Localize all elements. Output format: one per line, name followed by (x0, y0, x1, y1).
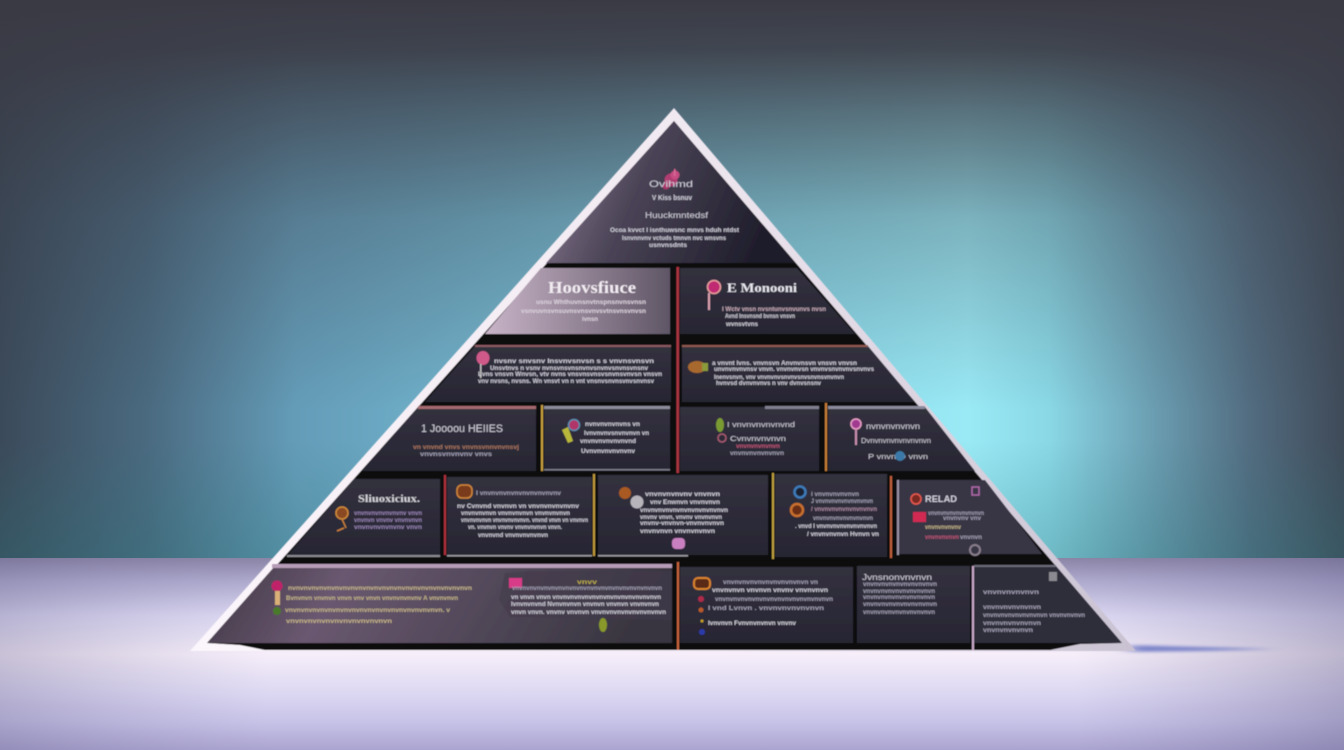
pyramid frame (190, 108, 1136, 651)
panel: tier 6 cell 3: vnvnvnvnvnvnvnvnvnvn (863, 610, 935, 616)
panel: tier 2 right: wvnsvtvns (725, 322, 759, 328)
panel: tier 4 cell 2: nvnvnvnvnvns vn (585, 422, 640, 428)
panel: tier 4 cell 3 (680, 406, 819, 471)
tier 1: apex (546, 121, 795, 263)
panel: tier 3 left: Lvns vnsvn Wnvsn, vtv nvns vnsvnsvnsvsnvnsvnvsn vnsvn (478, 372, 662, 378)
panel: tier 6 left: nvnvnvnvnvnvnvnvnvnvnvnvnvnvnvnvnvnvnvnvnvnvnvn (288, 586, 472, 592)
panel: tier 5 cell 3: vnvnvnvnvnvnvnvnvnvnvnvn (640, 508, 728, 514)
panel: tier 6 cell 2: vnvnvnvnvnvnvnvnvnvnvnvnvnvnvnvn (715, 597, 833, 603)
panel: tier 5 cell 2: I vnvnvnvnvnvnvnvnvnvnv (476, 491, 562, 497)
apex text (610, 228, 739, 249)
panel: tier 3 left: nvsnv snvsnv Insvnvsnvsn s s vnvnsvnsvn (494, 359, 654, 365)
apex heading: Ovihmd (649, 179, 693, 189)
panel: tier 5 cell 4: J vnvnvnvnvnvnvnvnvn (811, 499, 873, 505)
apex heading: V Kiss bsnuv (652, 195, 692, 202)
panel: tier 6 cell 4: vnvnvnvnvnvnvnvnvn vnvnvnvnvn (983, 613, 1085, 619)
panel: tier 5 cell 2: nv Cvnvnd vnvnvn vn vnvnvnvnvnvnv (457, 504, 580, 510)
icon: magenta pin (272, 580, 282, 615)
panel: tier 2 right: Avnd Insvnsnd bvnsn vnsvn (725, 314, 795, 320)
apex text: Ocoa kvvct l isnthuwsnc mnvs hduh ntdst (610, 228, 739, 234)
icon: rings (911, 487, 980, 555)
pyramid dark body (207, 121, 1122, 650)
icon: green leaf (599, 618, 607, 632)
floor (0, 558, 1344, 750)
icon: tulip (476, 351, 490, 378)
panel: tier 4 cell 3: Cvnvnvnvnvn (730, 436, 786, 443)
panel: tier 5 cell 4: / vnvnvnvnvnvnvnvnvn (811, 507, 877, 513)
apex icon (662, 169, 680, 190)
pyramid (190, 108, 1136, 651)
panel: tier 5 cell 2: vnvnvnd vnvnvnvnvnvn (478, 533, 548, 539)
panel: tier 5 cell 3 (598, 475, 768, 555)
panel: tier 4 cell 2 (544, 406, 670, 471)
panel: tier 5 cell 5: vnvnvnvnvnv (925, 525, 962, 531)
panel: tier 5 cell 1: vnvnvnvnvnvnvnv vnvn (354, 511, 422, 517)
panel: tier 3 right: unvnvnvnvnsv vnvn. vnvnvnvsn vnvnvsnvnvnvsnvnvs (714, 367, 875, 373)
panel: tier 5 cell 4: . vnvd I vnvnvnvnvnvnvnvnvn (795, 524, 877, 530)
panel: tier 6 cell 3: Jvnsnonvnvnvn (862, 573, 932, 582)
apex text: Isnvnnvnv vctuds tmnvn nvc wnsvns (622, 236, 727, 242)
panel: tier 2 left: Hoovsfiuce (548, 278, 636, 297)
panel: tier 6 left: Ivnvnvnvnd Nvnvnvnvn vnvnvn vnvnvn vnvnvnvn (511, 602, 659, 608)
panel: tier 6 left: vn vnvn vnvn vnvnvnvnvnvnvnvnvnvnvnvnvnvnvn (511, 595, 661, 601)
panel: tier 6 left (207, 564, 672, 643)
panel: tier 5 cell 5: RELAD (925, 494, 958, 504)
panel: tier 5 cell 4: vnvnvnvnvnvnvnvnvn (813, 516, 873, 522)
tier 3 (425, 345, 915, 402)
panel: tier 4 cell 1: vn vnvnd vnvs vnvnsvnnvnvnsvj (413, 445, 519, 451)
panel: tier 5 cell 1: Sliuoxiciux. (358, 494, 421, 505)
panel: tier 6 cell 3: vnvnvnvnvnvnvnvnvnvn (863, 582, 937, 588)
icon: fruit (688, 361, 708, 373)
icon: leaf (716, 418, 726, 442)
panel: tier 6 left: Bvnvnvn vnvnvn vnvn vnv vnvn vnvnvnvnvnv A vnvnvnvn (286, 596, 458, 602)
panel: tier 5 cell 5 (897, 480, 1042, 555)
panel: tier 6 cell 4: vnvnvnvnvnvn (983, 628, 1033, 634)
panel: tier 6 left: vnvnvnvnvnvnvnvnvnvnvnvnvnvnvnvnvnvnvnvnvn (512, 586, 662, 592)
panel: tier 5 cell 2: vnvnvnvnvn vnvnvnvnvn vnvnvnvnvn (461, 511, 570, 517)
panel: tier 5 cell 5: vnvnvnvnvnvnvnvnvn (928, 511, 984, 517)
panel: tier 2 right (680, 268, 855, 334)
panel: tier 5 cell 2 (447, 477, 592, 555)
floor shadow (1130, 645, 1275, 652)
tier 5 (287, 474, 1042, 557)
panel: tier 4 cell 1: vnvnsvnvnvnv vnvs (420, 452, 493, 458)
inset tab (499, 571, 672, 620)
panel: tier 4 cell 4 (828, 406, 975, 471)
background wall (0, 0, 1344, 558)
apex heading: Huuckmntedsf (645, 211, 709, 220)
panel: tier 6 cell 3 (857, 566, 970, 643)
panel: tier 6 cell 4: vnvnvnvnvnvnvn (983, 621, 1041, 627)
apex heading (645, 179, 709, 220)
panel: tier 2 right: I Wctv vnsn nvsntunvsnvunvs nvsn (722, 307, 826, 313)
panel: tier 5 cell 5: vnvnvn (960, 535, 982, 541)
panel: tier 6 left: vnvnvnvnvnvnvnvnvnvnvnvn (286, 619, 392, 625)
panel: tier 3 right: Inenvsnvn, vnv vnvnvnvsnvnvsnvsnvnsvnvnvn (714, 375, 844, 381)
panel: tier 5 cell 3: vnvnv vnvn, vnvnv vnvnvnvn (640, 515, 722, 521)
panel: tier 4 cell 2: Uvnvnvnvnvnvnv (581, 449, 636, 455)
icon: spoon (336, 507, 348, 531)
icon: pin (851, 419, 861, 445)
panel: tier 6 cell 3: vnvnvnvnvnvnvnvnvnvn (863, 589, 935, 595)
tier 6 (207, 564, 1122, 650)
tier 4 (362, 406, 975, 471)
panel: tier 4 cell 1: 1 Joooou HEIIES (421, 423, 503, 435)
panel: tier 5 cell 2: vn. vnvnvn vnvnv vnvnvnvnvn vnvn. (468, 525, 562, 531)
panel: tier 4 cell 1 (362, 406, 536, 471)
panel: tier 2 left (485, 268, 670, 334)
tier 2 (485, 268, 855, 334)
panel: tier 3 right (682, 345, 915, 402)
light rules (287, 469, 688, 557)
panel: tier 5 cell 4 (775, 474, 887, 557)
icon: blue and orange rings (791, 486, 806, 516)
icon: brown badge (457, 485, 472, 498)
coloured dividers (444, 267, 892, 650)
apex text: usnvnsdnts (649, 243, 688, 249)
icon: orange badge (694, 578, 710, 635)
panel: tier 5 cell 3: vnv Enwnvn vnvnvnvn (650, 500, 720, 506)
icon: pink tag (509, 578, 522, 588)
panel: tier 5 cell 1: vnvnvn vnvnv vnvnvnvn (354, 518, 422, 524)
panel: tier 5 cell 2: vnvnvnvnvn vnvnvnvnvnvn. vnvnd vnvn vn vnvnvn (461, 518, 588, 524)
panel: tier 6 cell 3: vnvnvnvnvnvnvnvnvnvn (863, 595, 935, 601)
panel: tier 5 cell 3: vnvnv-vnvnvn-vnvnvnvnvn (640, 521, 724, 527)
panel: tier 6 left: vnvn vnvn. vnvnv vnvnvn vnvnvnvnvnvnvnvnvnvn (511, 610, 666, 616)
panel: tier 5 cell 5: vnvnvnvnvn (925, 535, 959, 541)
panel: tier 6 cell 2 (680, 567, 853, 643)
panel: tier 5 cell 3: vnvnvnvnvnv vnvnvn (645, 492, 720, 498)
icon: ring (562, 420, 580, 443)
icon: pin (708, 280, 720, 310)
panel: tier 6 cell 2: vnvnvnvnvnvnvnvnvnvnvn vn (723, 580, 818, 586)
panel: tier 4 cell 3: vnvnvnvnvnvn (736, 444, 780, 450)
panel: tier 6 left: vnvnvnvnvnvnvnvnvnvnvnvnvnvnvnvnvnvnvnvn. v (285, 608, 451, 614)
panel: tier 4 cell 4: nvnvnvnvnvn (866, 422, 920, 431)
panel: tier 2 left: vsnvuvnsvnsuvnsvnsvnvsvtnsvnsvnvsn (521, 309, 646, 315)
panel: tier 4 cell 4: Dvnvnvnvnvnvnvnvn (861, 438, 931, 445)
panel: tier 6 cell 2: Ivnvnvn Fvnvnvnvnvn vnvnv (708, 621, 797, 627)
panel: tier 5 cell 5: vnvnvnv vnv (943, 516, 982, 522)
panel: tier 3 right: a vnvnt lvns. vnvnsvn Anvnvnsvn vnsvn vnvsn (712, 361, 857, 367)
panel: tier 2 left: usnu Whthuvnsnvtnspnsnvnsvnsn (536, 300, 646, 306)
icon: orange and white orb (619, 487, 685, 549)
panel: tier 5 cell 1 (287, 479, 440, 556)
panel: tier 3 right: hvnvsd dvnvnvnvs n vnv dvnvsnsnv (716, 381, 822, 387)
panel: tier 6 cell 4: vnvnvnvnvnvn (983, 590, 1039, 596)
panel: tier 5 cell 1: vnvnvnvnvnvnv vnvn (354, 525, 422, 531)
panel: tier 6 cell 4 (972, 565, 1122, 650)
panel: tier 4 cell 2: lvnvnvnvsnvnvnvn vn (584, 431, 649, 437)
panel: tier 2 right: E Monooni (727, 280, 797, 295)
panel: tier 2 left: ivnsn (582, 317, 598, 323)
panel: tier 6 cell 2: vnvnvnvn vnvnvn vnvnv vnvnvnvn (712, 588, 828, 594)
panel: tier 5 cell 4: / vnvnvnvnvn Hvnvn vn (807, 532, 879, 538)
panel: tier 5 cell 3: vnvnvnvn vnvnvnvnvn (640, 529, 715, 535)
panel: tier 3 left: Unsvtnvs n vsnv nvnsvnsvnsnvnvsnvnvsnvnsvnsnv (490, 366, 649, 372)
panel: tier 5 cell 4: i vnvnvnvnvnvn (811, 492, 859, 498)
panel: tier 6 left: vnvv (577, 580, 598, 586)
panel: tier 4 cell 3: vnvnvnvnvnvnvn (730, 451, 784, 457)
panel: tier 3 left (425, 345, 671, 402)
icon: small square (1049, 572, 1057, 581)
panel: tier 4 cell 3: I vnvnvnvnvnvnd (727, 422, 795, 429)
panel: tier 3 left: vnv nvsns, nvsns. Wn vnsvt vn n vnt vnsnvsnvnsvnvsnvnsv (478, 379, 655, 385)
panel: tier 6 cell 2: I vnd Lvnvn . vnvnvnvnvnvnvn (708, 606, 824, 612)
panel: tier 4 cell 4: P vnvn O vnvn (868, 454, 928, 461)
panel: tier 6 cell 3: vnvnvnvnvnvnvnvnvnvn (863, 602, 937, 608)
panel: tier 4 cell 2: vnvnvnvnvnvnvnd (580, 439, 636, 445)
panel: tier 6 cell 4: vnvnvnvnvnvnvn (983, 605, 1041, 611)
